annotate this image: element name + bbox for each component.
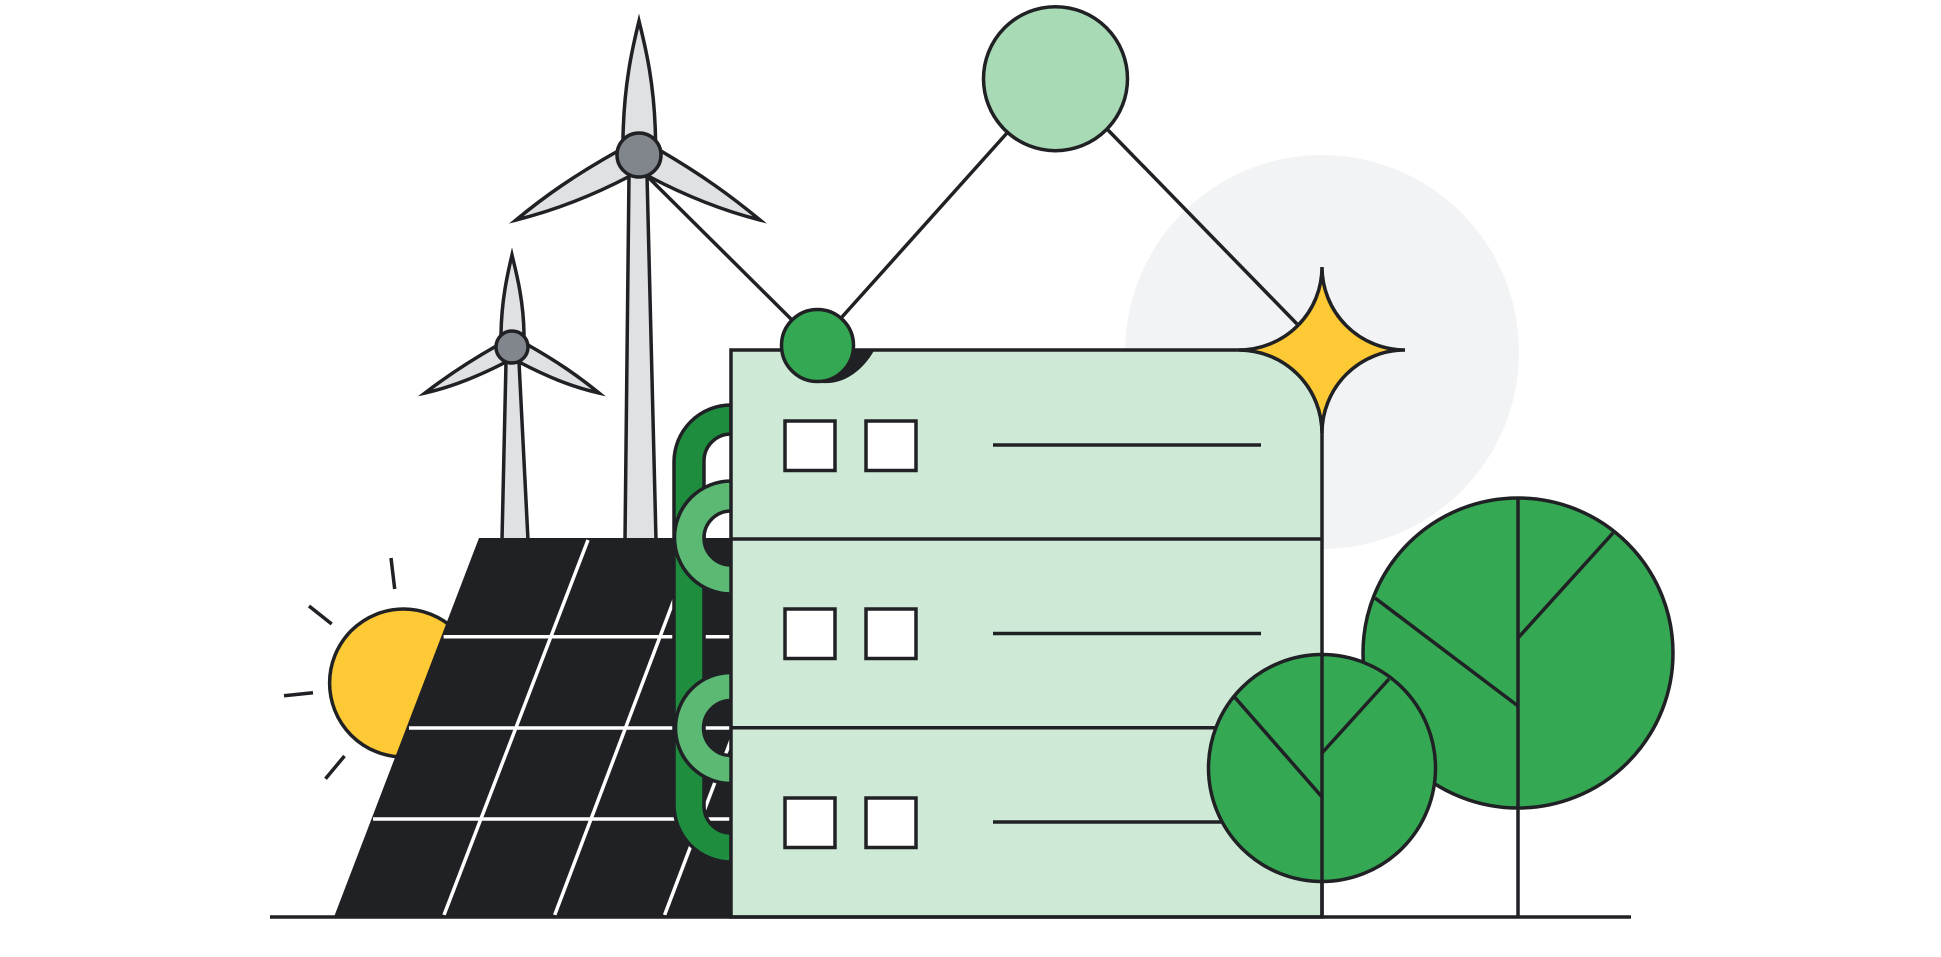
solar panel — [334, 538, 735, 917]
data center building — [731, 350, 1322, 917]
windows: top row — [785, 421, 916, 470]
wind turbine: large — [516, 21, 760, 540]
network connection lines — [648, 130, 1297, 324]
dark green cooling pipe — [674, 405, 731, 862]
windows: bottom row — [785, 798, 916, 848]
windows: middle row — [785, 609, 916, 658]
yellow sparkle star — [1239, 267, 1405, 433]
network node: green circle — [782, 310, 854, 382]
tree: small — [1208, 654, 1436, 917]
status lines — [993, 445, 1261, 822]
floor dividers — [731, 539, 1322, 728]
tree: large — [1363, 498, 1673, 917]
green node shadow — [806, 349, 875, 383]
solar panel grid lines — [373, 540, 731, 915]
ground line — [270, 915, 1631, 919]
wind turbine: small — [425, 255, 599, 540]
light green pipe ring: upper — [674, 481, 788, 594]
sun rays — [284, 558, 395, 779]
light green pipe ring: lower — [676, 672, 786, 784]
sun — [284, 558, 478, 779]
network node: mint circle — [984, 7, 1128, 151]
background grey circle — [1125, 155, 1519, 549]
